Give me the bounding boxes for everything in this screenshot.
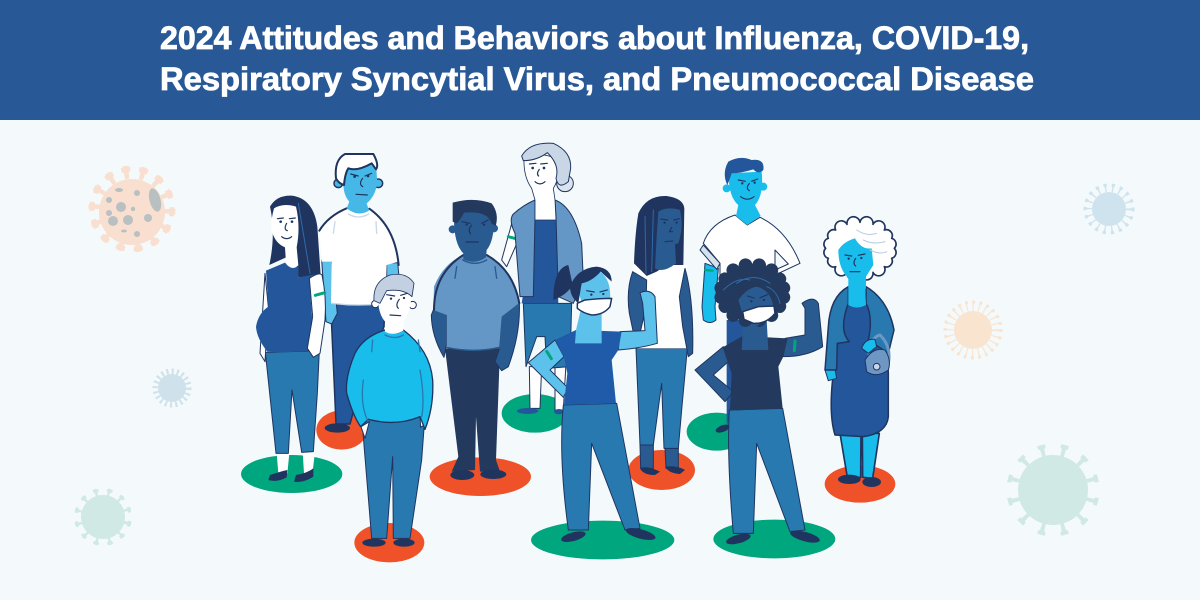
arm on hip: [695, 347, 733, 402]
virus: blue, upper right: [1085, 185, 1133, 233]
person: older woman with curly white hair and handbag, right: [824, 217, 896, 503]
header band: [0, 0, 1200, 120]
virus: peach spotted, upper left: [92, 169, 172, 249]
head: [723, 158, 767, 225]
person: young man in white v-neck, back right: [687, 158, 800, 451]
person: boy in bright blue sweater, front left: [346, 274, 433, 562]
face: [271, 203, 310, 273]
handbag: [862, 335, 889, 375]
curly hair and face: [824, 217, 896, 292]
person: masked woman with afro flexing arm, front right: [695, 258, 835, 558]
person: woman with long dark hair in white top: [628, 196, 695, 490]
person: older woman in cardigan, back centre: [502, 143, 583, 433]
head: [522, 143, 573, 220]
title: Respiratory Syncytial Virus, and Pneumococcal Disease: [160, 61, 1034, 97]
head: [372, 274, 416, 334]
arms: [628, 268, 693, 357]
title: 2024 Attitudes and Behaviors about Influenza, COVID-19,: [160, 20, 1029, 56]
flexed arm and raised fist: [618, 291, 657, 350]
person: older man in white t-shirt, back left: [316, 154, 399, 450]
flexed arm with bandage: [783, 299, 823, 357]
virus: small blue, left: [156, 372, 188, 404]
head: [449, 200, 498, 262]
head: [334, 154, 383, 214]
virus: orange, right: [945, 302, 1001, 358]
person: pregnant woman with bandage, left: [241, 196, 342, 493]
person: masked woman flexing arm, front centre: [528, 265, 674, 559]
virus: green, lower left: [71, 485, 135, 549]
hair: [269, 196, 321, 277]
arm on hip with bandage: [528, 340, 568, 397]
title: [160, 20, 1034, 97]
hair and face: [634, 196, 684, 276]
head with mask and ponytail: [553, 265, 612, 343]
person: man with dark skin in blue t-shirt, centre: [430, 200, 531, 496]
virus: large green, lower right: [1000, 437, 1106, 543]
afro, face and mask: [714, 258, 790, 327]
